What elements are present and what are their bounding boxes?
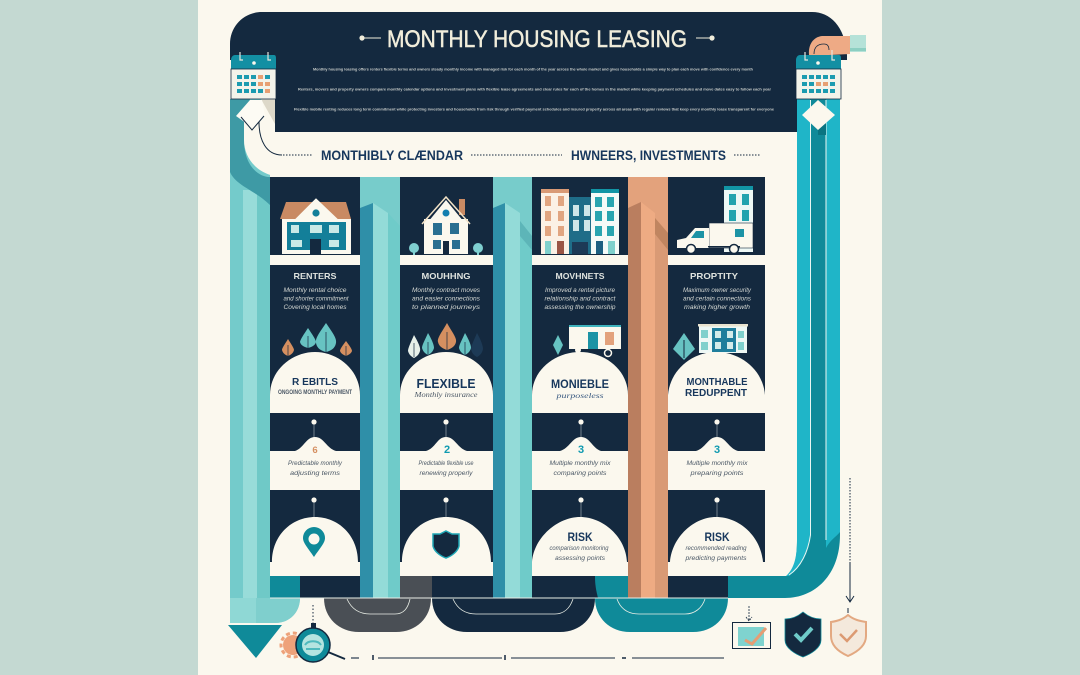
- icon: checked box: [732, 606, 770, 648]
- heading: RENTERS: [294, 271, 337, 281]
- lower arch: [270, 497, 360, 576]
- step marker: [560, 419, 601, 451]
- dotted divider: [471, 154, 761, 156]
- right footer ribbon overlay: [728, 576, 765, 598]
- header description: Flexible mobile renting reduces long term commitment while protecting investors and households from risk through verified payment schedules and insured property across all areas with regular reviews that keep every monthly lease transparent for everyone: [294, 108, 774, 112]
- arrow: left chevron: [236, 100, 313, 155]
- icon: apartment row: [541, 189, 619, 254]
- timeline: [351, 655, 724, 660]
- description: to planned journeys: [412, 304, 481, 311]
- step text: Predictable monthly: [288, 460, 343, 467]
- description: [544, 287, 617, 311]
- arch: [532, 352, 628, 413]
- panel: property: [668, 177, 765, 598]
- description: Covering local homes: [284, 304, 347, 311]
- icon: tower and truck: [677, 186, 753, 254]
- step text: [418, 460, 474, 477]
- panel: moving: [400, 177, 493, 598]
- step marker: [426, 419, 467, 451]
- step text: [288, 460, 343, 477]
- step text: comparing points: [554, 470, 607, 477]
- risk label: RISK: [704, 532, 730, 544]
- subheading: investments: HWNEERS, INVESTMENTS: [571, 148, 726, 163]
- icon: small house: [409, 197, 483, 255]
- heading: PROPTITY: [690, 271, 738, 281]
- icon: orange shield: [831, 608, 866, 656]
- cream step block: [270, 445, 360, 490]
- description: Monthly rental choice: [284, 287, 347, 294]
- arch label: R EBITLS: [292, 377, 338, 388]
- panel: movements: [532, 177, 628, 598]
- step text: adjusting terms: [290, 470, 341, 477]
- lower arch: [532, 497, 628, 576]
- arch sublabel: purposeless: [555, 392, 604, 400]
- arch label: [685, 376, 748, 399]
- step number: 6: [312, 445, 318, 456]
- risk text: predicting payments: [684, 555, 747, 562]
- heading: MOUHHNG: [422, 271, 471, 281]
- step number: 2: [444, 444, 450, 456]
- icon: tree and building: [673, 324, 748, 360]
- icon: location pin: [303, 527, 325, 557]
- step text: [550, 460, 611, 477]
- arch sublabel: Monthly insurance: [413, 391, 478, 399]
- icon: hand holding calendar: [805, 35, 866, 60]
- description: [683, 287, 752, 311]
- step text: Multiple monthly mix: [550, 460, 611, 467]
- icon: large house: [280, 199, 351, 254]
- step text: renewing properly: [420, 470, 473, 477]
- description: and shorter commitment: [284, 296, 350, 302]
- step text: Predictable flexible use: [418, 460, 474, 467]
- risk label: RISK: [568, 532, 593, 544]
- arch label: FLEXIBLE: [416, 377, 476, 391]
- description: Monthly contract moves: [412, 287, 481, 294]
- description: relationship and contract: [544, 296, 617, 302]
- teal strip 2: [493, 177, 532, 598]
- step text: Multiple monthly mix: [686, 460, 748, 467]
- teal strip 1: [360, 177, 400, 598]
- lower arch: [668, 497, 765, 576]
- title ornament right: [696, 35, 715, 41]
- icon: mobile home: [553, 325, 621, 356]
- description: Improved a rental picture: [545, 287, 615, 294]
- arrow: down triangle: [228, 625, 282, 658]
- arch sublabel: ONGOING MONTHLY PAYMENT: [278, 389, 352, 396]
- description: making higher growth: [684, 304, 750, 311]
- U-shaped connectors: [270, 598, 728, 632]
- title ornament left: [359, 35, 381, 41]
- icon: trees: [282, 323, 352, 357]
- header description: Renters, movers and property owners compare monthly calendar options and investment plans with flexible lease agreements and clear rules for each of the homes in the market while keeping payment schedules and move dates easy to follow each year: [298, 88, 772, 92]
- footer grey block: [400, 576, 432, 598]
- footer teal block: [595, 576, 628, 598]
- arch label: MONIEBLE: [551, 377, 609, 391]
- description: and certain connections: [683, 296, 752, 302]
- risk text: [550, 545, 609, 562]
- cream step block: [400, 444, 493, 490]
- panel: renters: [270, 177, 360, 598]
- arch label: REDUPPENT: [685, 387, 748, 399]
- cream band: [244, 99, 797, 177]
- risk text: comparison monitoring: [550, 545, 609, 552]
- risk text: recommended reading: [686, 545, 747, 552]
- arch: [668, 352, 765, 413]
- step marker: [295, 419, 336, 451]
- step text: [686, 460, 748, 477]
- description: [284, 287, 350, 311]
- arrow: dashed down: [846, 478, 854, 602]
- orange strip: [628, 177, 668, 598]
- cream step block: [532, 444, 628, 490]
- step number: 3: [714, 444, 720, 456]
- cream step block: [668, 444, 765, 490]
- icon: calendar right: [796, 55, 841, 99]
- header panel: [230, 12, 847, 132]
- risk text: assessing points: [555, 555, 606, 562]
- step marker: [696, 419, 738, 451]
- lower arch: [400, 497, 493, 576]
- description: Maximum owner security: [683, 287, 752, 294]
- icon: dark shield: [785, 612, 821, 657]
- footer teal block: [270, 576, 300, 598]
- step number: 3: [578, 444, 584, 456]
- header description: [294, 68, 774, 112]
- heading: MOVHNETS: [556, 271, 605, 281]
- arch: [400, 352, 493, 413]
- subheading: calendar: MONTHIBLY CLÆNDAR: [321, 148, 463, 163]
- icon: shield: [433, 531, 459, 558]
- arch: [270, 352, 360, 413]
- risk text: [684, 545, 747, 562]
- left ribbon: [230, 99, 300, 623]
- header description: Monthly housing leasing offers renters flexible terms and owners steady monthly income with managed risk for each month of the year across the whole market and gives households a simple way to plan each move with confidence every month: [313, 68, 754, 72]
- beige fold: [261, 99, 275, 124]
- icon: magnifier and gear: [281, 605, 345, 662]
- arrow: right diamond: [802, 100, 835, 135]
- arch label: MONTHABLE: [686, 376, 748, 388]
- right ribbon: [728, 90, 840, 598]
- description: [412, 287, 481, 311]
- step text: preparing points: [689, 470, 744, 477]
- title: MONTHLY HOUSING LEASING: [387, 26, 687, 53]
- icon: calendar left: [231, 52, 276, 99]
- description: assessing the ownership: [544, 304, 616, 311]
- description: and easier connections: [412, 296, 481, 302]
- icon: trees: [408, 323, 483, 358]
